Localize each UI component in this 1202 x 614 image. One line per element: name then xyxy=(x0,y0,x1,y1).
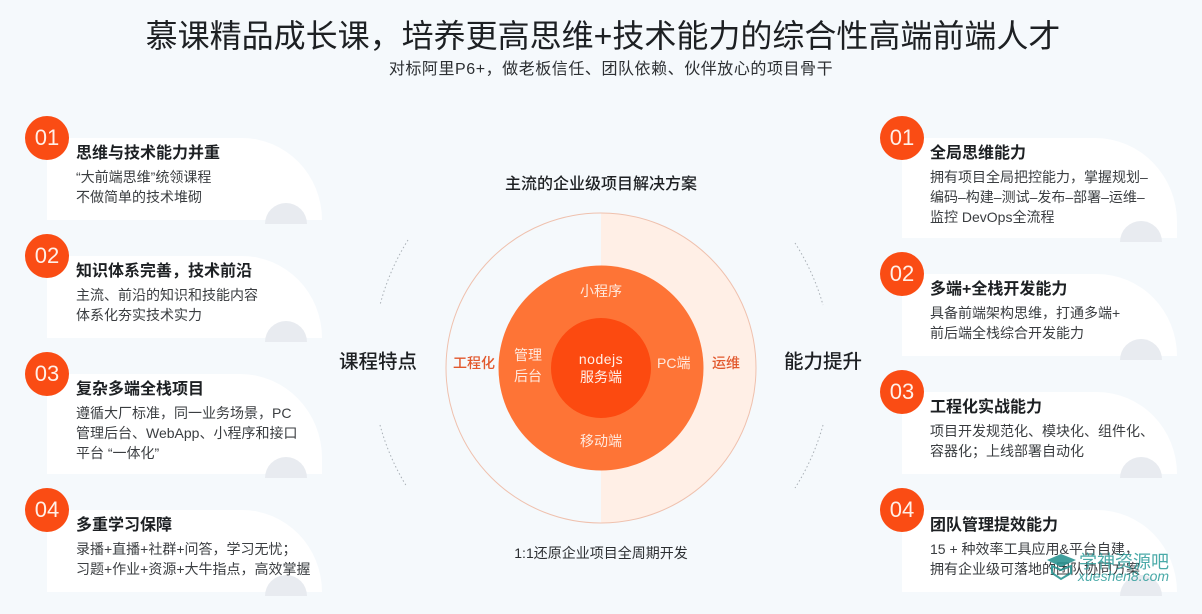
panel: ability 03 xyxy=(880,370,1177,478)
inner circle xyxy=(551,318,651,418)
badge 01: 01 xyxy=(35,125,59,150)
subtitle: 对标阿里P6+，做老板信任、团队依赖、伙伴放心的项目骨干 xyxy=(389,61,833,78)
right dotted arc xyxy=(794,242,824,488)
panel: course feature 04 xyxy=(25,488,322,596)
badge 04 xyxy=(25,488,69,532)
text: 15 + 种效率工具应用&平台自建， xyxy=(930,541,1139,557)
heading: 工程化实战能力 xyxy=(930,399,1042,416)
text: 平台 “一体化” xyxy=(76,445,159,461)
text: 监控 DevOps全流程 xyxy=(930,209,1054,225)
heading: 多端+全栈开发能力 xyxy=(930,281,1067,298)
text: 体系化夯实技术实力 xyxy=(76,307,202,323)
watermark xyxy=(1047,552,1169,584)
text: 容器化；上线部署自动化 xyxy=(930,443,1084,459)
text: 录播+直播+社群+问答，学习无忧； xyxy=(76,541,297,557)
text xyxy=(76,287,258,323)
heading: 复杂多端全栈项目 xyxy=(76,381,204,398)
heading: 多重学习保障 xyxy=(76,517,172,534)
label: PC: PC端 xyxy=(657,355,690,371)
label: ops: 运维 xyxy=(712,355,740,371)
panel: course feature 02 xyxy=(25,234,322,342)
panel: ability 02 xyxy=(880,252,1177,360)
outer ring right half xyxy=(601,213,756,523)
badge 02 xyxy=(25,234,69,278)
heading: 团队管理提效能力 xyxy=(930,517,1058,534)
badge 03: 03 xyxy=(890,379,914,404)
label: ability growth: 能力提升 xyxy=(784,351,862,373)
label: mini program: 小程序 xyxy=(580,283,622,299)
outer ring outline xyxy=(446,213,756,523)
badge 02: 02 xyxy=(35,243,59,268)
text: 拥有企业级可落地的团队协同方案 xyxy=(930,561,1140,577)
concentric circle diagram xyxy=(446,212,756,524)
icon: mortarboard xyxy=(1047,554,1076,580)
text xyxy=(76,541,311,577)
badge 04: 04 xyxy=(35,497,59,522)
badge 04: 04 xyxy=(890,497,914,522)
label: nodejs server: 服务端 xyxy=(580,369,622,385)
diagram heading: 主流的企业级项目解决方案 xyxy=(505,176,697,193)
heading: 思维与技术能力并重 xyxy=(76,145,220,162)
label: admin: 管理 xyxy=(514,347,542,363)
text: 遵循大厂标准，同一业务场景，PC xyxy=(76,405,291,421)
text xyxy=(930,541,1140,577)
label: nodejs server xyxy=(579,351,623,385)
text xyxy=(930,305,1120,341)
text: 不做简单的技术堆砌 xyxy=(76,189,202,205)
text: 具备前端架构思维，打通多端+ xyxy=(930,305,1120,321)
watermark url: xueshen8.com xyxy=(1078,568,1169,584)
text: 编码–构建–测试–发布–部署–运维– xyxy=(930,189,1145,205)
badge 02 xyxy=(880,252,924,296)
panel: ability 01 xyxy=(880,116,1177,242)
label: nodejs server: nodejs xyxy=(579,351,623,367)
diagram caption: 1:1还原企业项目全周期开发 xyxy=(514,545,688,561)
badge 03: 03 xyxy=(35,361,59,386)
panel: course feature 03 xyxy=(25,352,322,478)
panel: ability 04 xyxy=(880,488,1177,596)
title: 慕课精品成长课，培养更高思维+技术能力的综合性高端前端人才 xyxy=(146,18,1060,54)
text: 拥有项目全局把控能力，掌握规划– xyxy=(930,169,1148,185)
watermark name: 学神资源吧 xyxy=(1079,552,1169,572)
badge 01: 01 xyxy=(890,125,914,150)
text: 习题+作业+资源+大牛指点，高效掌握 xyxy=(76,561,311,577)
text: 管理后台、WebApp、小程序和接口 xyxy=(76,425,297,441)
text xyxy=(76,169,211,205)
text: 项目开发规范化、模块化、组件化、 xyxy=(930,423,1154,439)
middle circle xyxy=(498,266,704,470)
label: mobile: 移动端 xyxy=(580,433,622,449)
text: 前后端全栈综合开发能力 xyxy=(930,325,1084,341)
text xyxy=(76,405,297,461)
text xyxy=(930,169,1148,225)
label: admin: 后台 xyxy=(514,368,542,384)
badge 04 xyxy=(880,488,924,532)
text: “大前端思维”统领课程 xyxy=(76,169,211,185)
text: 主流、前沿的知识和技能内容 xyxy=(76,287,258,303)
label: admin xyxy=(514,347,542,384)
heading: 全局思维能力 xyxy=(930,145,1026,162)
label: course features: 课程特点 xyxy=(339,351,417,373)
label: engineering: 工程化 xyxy=(453,355,495,371)
text xyxy=(930,423,1154,459)
panel: course feature 01 xyxy=(25,116,322,224)
left dotted arc xyxy=(380,240,408,486)
heading: 知识体系完善，技术前沿 xyxy=(76,263,252,280)
badge 01 xyxy=(880,116,924,160)
badge 03 xyxy=(25,352,69,396)
badge 03 xyxy=(880,370,924,414)
badge 01 xyxy=(25,116,69,160)
badge 02: 02 xyxy=(890,261,914,286)
